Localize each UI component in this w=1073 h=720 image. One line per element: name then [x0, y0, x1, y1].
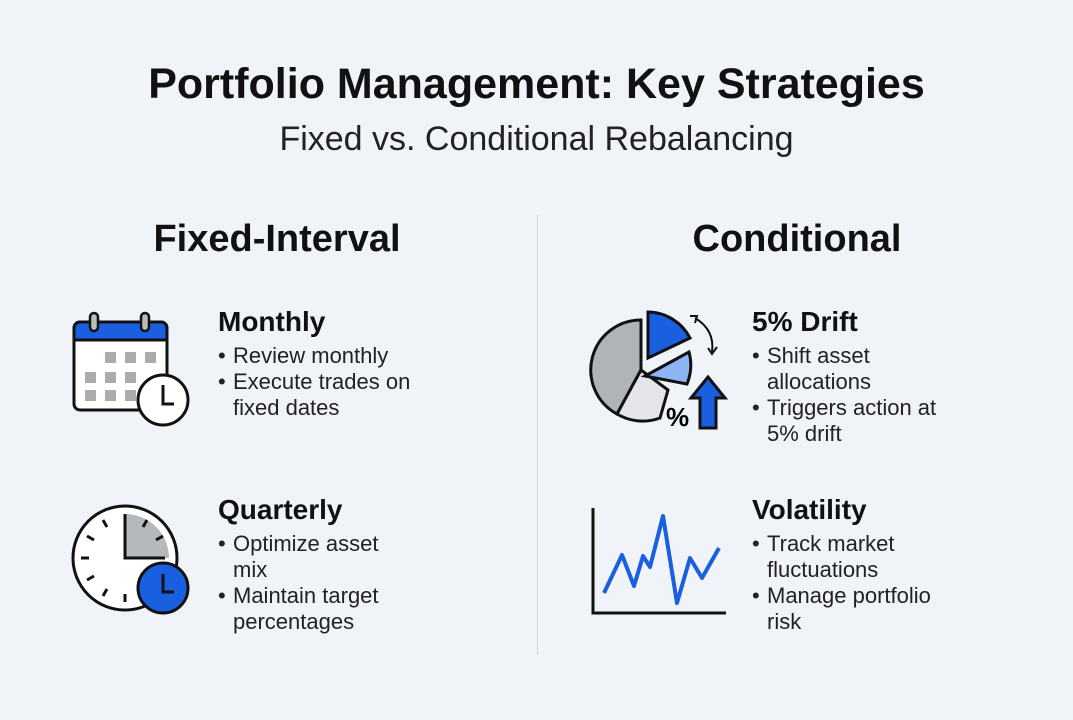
text: Quarterly: Maintain target	[233, 583, 379, 608]
icon: volatility chart	[592, 508, 726, 614]
text: 5% Drift: 5% drift	[767, 421, 842, 446]
text: 5% Drift: 5% Drift	[752, 306, 858, 337]
text: Volatility: Track market	[767, 531, 895, 556]
text: Monthly: Review monthly	[233, 343, 388, 368]
text: Quarterly: percentages	[233, 609, 354, 634]
icon: calendar	[72, 312, 190, 426]
text: Monthly: Monthly	[218, 306, 325, 337]
text: 5% Drift: Shift asset	[767, 343, 870, 368]
text: Volatility	[752, 494, 931, 634]
heading: Fixed-Interval: Fixed-Interval	[153, 218, 401, 260]
text: Quarterly: Optimize asset	[233, 531, 378, 556]
text: Volatility: risk	[767, 609, 801, 634]
text: 5% Drift	[752, 306, 936, 446]
text: Monthly: fixed dates	[233, 395, 339, 420]
icon: pie chart drift: %	[666, 402, 689, 432]
text: Quarterly: Quarterly	[218, 494, 342, 525]
title: Portfolio Management: Key Strategies	[148, 60, 925, 108]
text: Monthly: Execute trades on	[233, 369, 410, 394]
text: Volatility: fluctuations	[767, 557, 878, 582]
text: 5% Drift: allocations	[767, 369, 871, 394]
text: Quarterly: mix	[233, 557, 267, 582]
icon: pie chart drift	[589, 310, 728, 432]
heading: Conditional: Conditional	[693, 218, 901, 260]
text: Volatility: Manage portfolio	[767, 583, 931, 608]
text: Volatility: Volatility	[752, 494, 867, 525]
text: Monthly	[218, 306, 410, 420]
subtitle: Fixed vs. Conditional Rebalancing	[279, 120, 794, 158]
text: 5% Drift: Triggers action at	[767, 395, 936, 420]
icon: clock	[72, 504, 190, 614]
text: Quarterly	[218, 494, 379, 634]
